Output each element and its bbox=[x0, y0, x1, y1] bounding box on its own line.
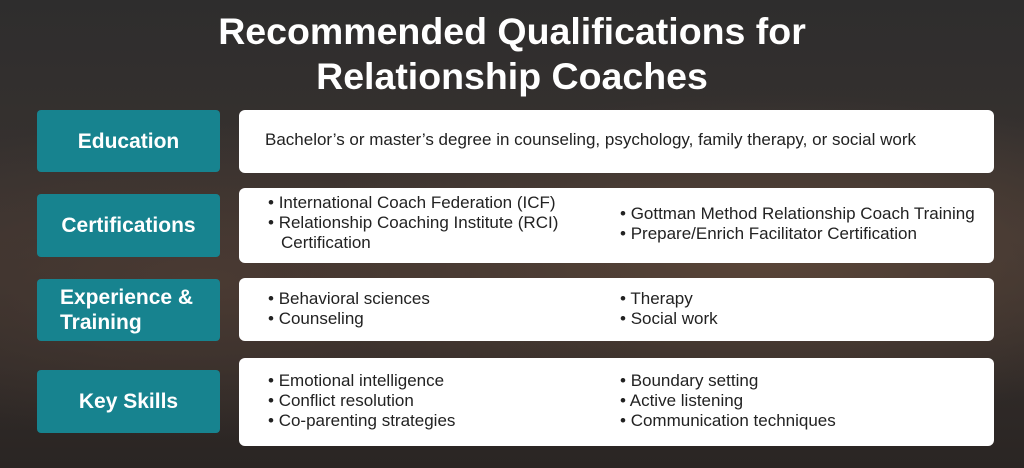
label: experience: Experience & bbox=[60, 286, 193, 309]
panel: certifications: International Coach Federation (ICF) bbox=[279, 193, 556, 212]
title: Relationship Coaches bbox=[316, 55, 708, 97]
label: experience bbox=[37, 279, 220, 341]
panel: certifications: Certification bbox=[281, 233, 371, 252]
panel: key skills: Co-parenting strategies bbox=[279, 411, 455, 430]
panel: certifications: Prepare/Enrich Facilitator Certification bbox=[631, 224, 917, 243]
panel: key skills: Conflict resolution bbox=[279, 391, 414, 410]
panel: certifications: Gottman Method Relationship Coach Training bbox=[631, 204, 975, 223]
panel: key skills: Communication techniques bbox=[631, 411, 836, 430]
panel: experience: Therapy bbox=[630, 289, 693, 308]
panel: education bbox=[239, 110, 994, 173]
panel: education: Bachelor’s or master’s degree in counseling, psychology, family therapy, or social work bbox=[265, 130, 916, 149]
title bbox=[218, 10, 806, 97]
panel: experience: Behavioral sciences bbox=[279, 289, 430, 308]
label: key skills: Key Skills bbox=[79, 390, 178, 413]
panel: key skills bbox=[239, 358, 994, 446]
panel: key skills: Active listening bbox=[630, 391, 743, 410]
label: education bbox=[37, 110, 220, 172]
panel: key skills: Emotional intelligence bbox=[279, 371, 444, 390]
label: key skills bbox=[37, 370, 220, 433]
label: certifications bbox=[37, 194, 220, 257]
title: Recommended Qualifications for bbox=[218, 10, 806, 52]
panel: certifications bbox=[239, 188, 994, 263]
panel: experience: Counseling bbox=[279, 309, 364, 328]
panel: experience bbox=[239, 278, 994, 341]
label: experience: Training bbox=[60, 311, 142, 334]
label: education: Education bbox=[78, 130, 179, 152]
panel: certifications: Relationship Coaching Institute (RCI) bbox=[279, 213, 558, 232]
panel: experience: Social work bbox=[631, 309, 718, 328]
panel: key skills: Boundary setting bbox=[631, 371, 758, 390]
label: certifications: Certifications bbox=[61, 214, 196, 237]
